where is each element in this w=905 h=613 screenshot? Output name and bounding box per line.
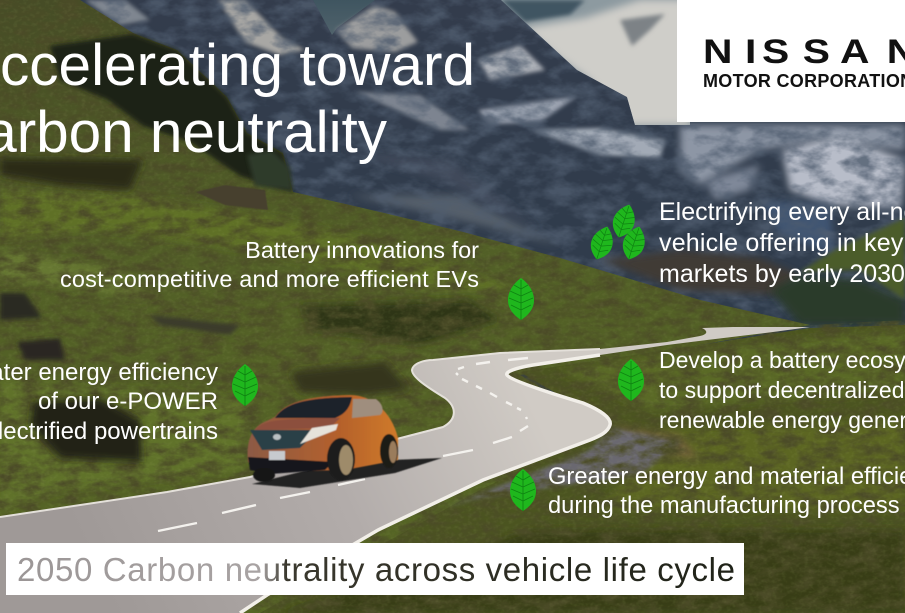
text: manufacturing efficiency <box>548 464 905 519</box>
wheels <box>327 438 355 480</box>
road centre dashes <box>158 358 528 531</box>
sky <box>300 0 690 60</box>
text: e-POWER powertrains <box>0 359 218 445</box>
text: e-POWER powertrains: of our e-POWER <box>38 388 218 415</box>
text: battery innovations <box>60 237 479 292</box>
leaf icon: manufacturing <box>510 469 536 511</box>
bumper <box>248 457 333 474</box>
front grille <box>250 430 318 450</box>
text: battery ecosystem: to support decentralized <box>659 377 904 403</box>
brown ridge and dark hills <box>600 250 800 295</box>
leaf icon group: electrification <box>587 201 649 263</box>
banner: 2050 carbon neutrality <box>6 543 744 595</box>
hood <box>255 418 340 430</box>
side windows <box>352 399 383 418</box>
boulders <box>195 185 268 210</box>
cloud beside the logo panel <box>501 0 691 130</box>
text: battery innovations: cost-competitive and more efficient EVs <box>60 266 479 292</box>
dark rock outcrop <box>50 34 293 192</box>
car: orange Nissan Ariya <box>248 395 398 482</box>
car shadow on road <box>252 458 442 488</box>
brown earth and gravel by the road <box>515 378 700 460</box>
text: battery innovations: Battery innovations for <box>245 237 479 263</box>
right distant green slope <box>800 218 905 300</box>
leaf icon: e-POWER <box>232 364 258 406</box>
far right snowfields <box>680 125 905 185</box>
text: manufacturing efficiency: during the manufacturing process <box>548 493 900 519</box>
right lower meadow <box>260 325 905 613</box>
leaf icon: battery ecosystem <box>618 359 644 401</box>
snow patches <box>218 0 305 55</box>
text: electrifying every vehicle: vehicle offering in key <box>659 229 904 257</box>
banner: 2050 carbon neutrality: 2050 Carbon neutrality across vehicle life cycle <box>17 551 735 588</box>
text: electrifying every vehicle <box>659 198 905 288</box>
headlight <box>300 424 338 444</box>
text: battery ecosystem <box>659 347 905 433</box>
distant mountains <box>0 0 905 330</box>
windshield <box>275 397 352 418</box>
logo panel: Nissan Motor Corporation <box>677 0 905 122</box>
leaf icon: battery innovations <box>508 278 534 320</box>
road <box>0 327 810 613</box>
title <box>0 33 475 165</box>
